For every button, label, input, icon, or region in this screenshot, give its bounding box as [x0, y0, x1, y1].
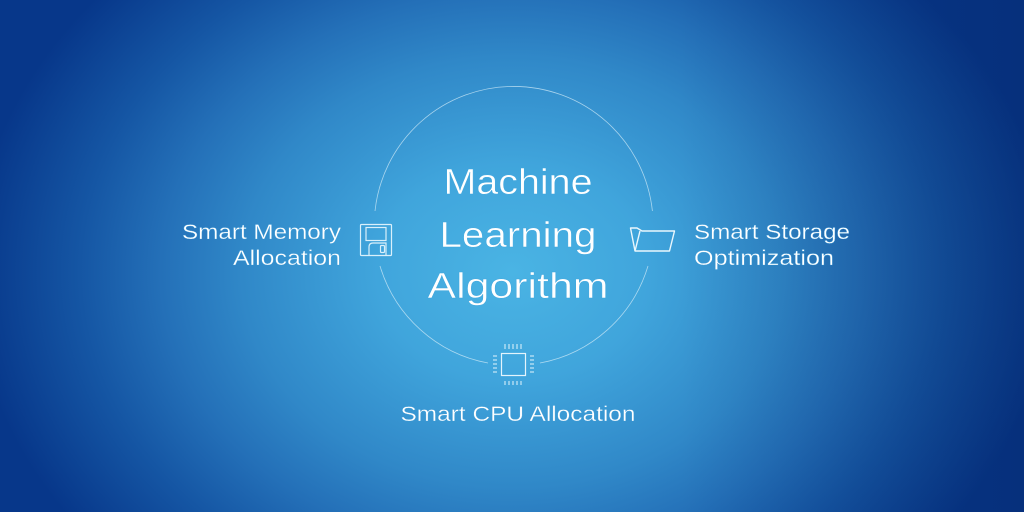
title — [428, 161, 608, 306]
icon: cpu chip — [493, 344, 534, 385]
label: smart memory allocation: Smart Memory — [182, 221, 342, 244]
label: smart storage optimization — [694, 221, 850, 270]
label: smart cpu allocation: Smart CPU Allocation — [400, 403, 636, 426]
label: smart memory allocation: Allocation — [233, 247, 341, 270]
icon: folder — [630, 228, 674, 251]
title: Algorithm — [428, 265, 608, 306]
title: Machine — [444, 161, 592, 202]
label: smart storage optimization: Optimization — [694, 247, 834, 270]
label: smart memory allocation — [182, 221, 342, 270]
circle arcs — [375, 86, 652, 363]
title: Learning — [440, 214, 596, 255]
label: smart storage optimization: Smart Storage — [694, 221, 850, 244]
icon: floppy disk — [360, 224, 392, 256]
